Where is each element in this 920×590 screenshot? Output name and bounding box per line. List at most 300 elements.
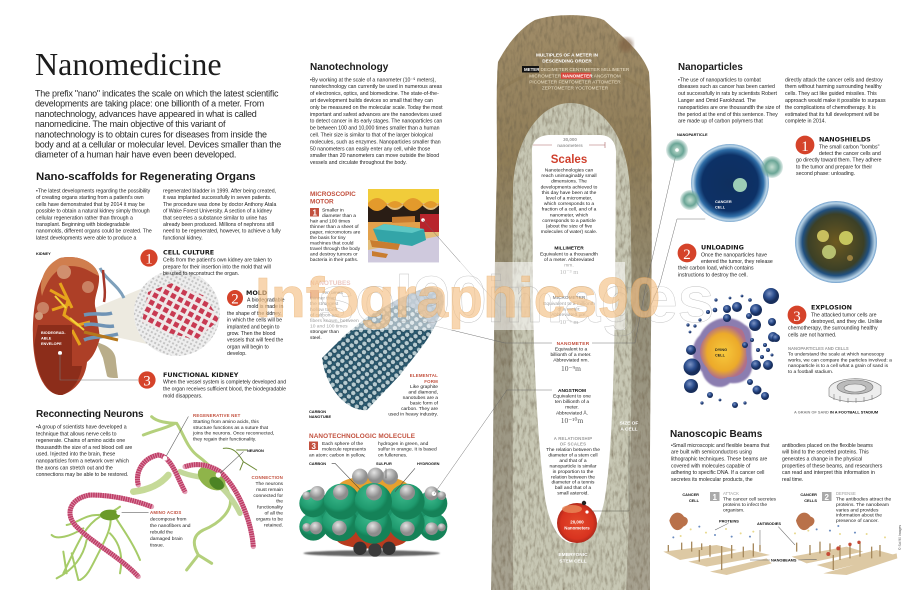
callout: elemental form: nanotubes are a bbox=[403, 395, 438, 401]
text: a relationship of scales: diameter of a tennis bbox=[552, 480, 595, 486]
callout: amino acids: rebuild the bbox=[150, 530, 173, 536]
block: multiples of a meter: MULTIPLES OF A METER IN bbox=[536, 52, 599, 58]
text: scales description: level of a micrometer, bbox=[546, 196, 592, 202]
caption: grain of sand: A GRAIN OF SAND IN A FOOTBALL STADIUM bbox=[794, 410, 878, 414]
step 2: mold: A biodegradable bbox=[247, 298, 285, 304]
illustration: red stem cell: Nanometers bbox=[564, 526, 590, 530]
block: microscopic motor: and destroy tumors or bbox=[310, 252, 358, 258]
step 1: nanoshields: NANOSHIELDS bbox=[819, 136, 871, 144]
scale: nanometer: 10⁻⁹m bbox=[561, 364, 581, 373]
label: biodegradable envelope: ENVELOPE bbox=[41, 342, 62, 346]
scale: millimeter: MILLIMETER bbox=[554, 246, 584, 252]
labels: molecule atoms bbox=[309, 461, 440, 466]
text: a relationship of scales: A RELATIONSHIP bbox=[554, 436, 592, 441]
step 2: unloading: Once the nanoparticles have bbox=[701, 252, 767, 258]
text: scales description: nanometer, which bbox=[550, 212, 588, 218]
illustration: cancer cell: CELL bbox=[715, 204, 726, 210]
block: nanotechnologic molecule text: hydrogen in green, and bbox=[378, 441, 429, 447]
text: nanoparticles column two: them without harming surrounding healthy bbox=[785, 84, 882, 90]
label: neuron: NEURON bbox=[247, 448, 264, 453]
illustration: embryonic cell background bbox=[491, 15, 652, 590]
step 1: attack: proteins to infect the bbox=[723, 502, 767, 508]
step 2: unloading bbox=[678, 244, 773, 278]
block: carbon nanotube text: thinner than bbox=[310, 296, 336, 302]
text: beams column two: will bind to the secreted proteins. This bbox=[782, 450, 869, 456]
illustration: carbon nanotube bbox=[322, 287, 444, 410]
text: nanoparticles and cells: works, we can compare the particles involved: a bbox=[788, 357, 892, 363]
intro text: developments are taking place: one billionth of a meter. From bbox=[35, 99, 264, 109]
step 1: cell culture: CELL CULTURE bbox=[163, 248, 214, 256]
callout: connection: CONNECTION bbox=[251, 475, 283, 480]
scale: millimeter bbox=[540, 246, 598, 276]
step 3: explosion: EXPLOSION bbox=[811, 304, 852, 312]
text: nanotechnology intro: smaller than 20 nanometers can move outside the blood bbox=[310, 153, 439, 159]
text: beams column one: adhering to specific DNA. If a cancer cell bbox=[671, 470, 764, 476]
scale: micrometer: of a meter. bbox=[557, 306, 581, 312]
step 1: attack: The cancer cell secretes bbox=[723, 496, 777, 502]
text: nanotechnology intro: to detect cancer in its early stages. The nanoparticles can bbox=[310, 119, 442, 125]
text: scaffolds column one: cells have demonstrated that by 2014 it may be bbox=[36, 202, 145, 208]
text: a relationship of scales: diameter of a stem cell bbox=[548, 452, 598, 458]
text: scales description: developments achieved to bbox=[541, 184, 598, 190]
text: nanotechnology intro: cell. Their size is similar to that of the larger biological bbox=[310, 132, 433, 138]
step 1: attack: 1 bbox=[712, 493, 718, 502]
text: neurons intro: regenerate. Chains of amino acids one bbox=[36, 438, 125, 444]
text: scales description: which corresponds to a bbox=[544, 201, 594, 207]
text: scaffolds column two: The procedure was done by doctor Anthony Atala bbox=[163, 202, 276, 208]
step 1: cell culture bbox=[140, 248, 272, 277]
text: neurons intro: thousandth the size of a red blood cell are bbox=[36, 445, 132, 451]
label: carbon nanotube: CARBON bbox=[309, 409, 326, 414]
illustration: nanobeams bbox=[663, 513, 897, 575]
text: a relationship of scales: small asteroid. bbox=[557, 491, 589, 497]
image: micromotor bbox=[368, 189, 439, 263]
text: nanoparticles column two: the complications of chemotherapy. It is bbox=[785, 105, 876, 111]
block: microscopic motor: MOTOR bbox=[310, 199, 334, 206]
connector: kidney to step three bbox=[60, 354, 138, 380]
credit: © Sol 90 Images bbox=[898, 525, 902, 550]
illustration: dying cell explosion bbox=[684, 288, 780, 408]
scale: micrometer: Abbreviated μm. bbox=[551, 312, 587, 318]
text: nanoparticles column two: approach would make it possible to surpass bbox=[785, 98, 886, 104]
step 3: functional kidney bbox=[138, 371, 286, 400]
callout: elemental form: used in heavy industry. bbox=[388, 412, 438, 418]
block: carbon nanotube text: the strongest bbox=[310, 301, 339, 307]
text: neurons intro: used. Injected into the brain, these bbox=[36, 452, 115, 458]
step 2: defense: varies and provides bbox=[836, 507, 879, 513]
scale: nanometer bbox=[550, 341, 592, 373]
text: beams column two: generates a change in the physical bbox=[782, 456, 862, 462]
text: a relationship of scales bbox=[546, 436, 600, 497]
step 2: unloading: their carbon load, which contains bbox=[678, 266, 754, 272]
block: microscopic motor: thinner than a sheet of bbox=[310, 224, 359, 230]
text: nanoparticles column one: are made up of carbon polymers that bbox=[678, 119, 763, 125]
illustration: dying cell explosion: DYING bbox=[715, 348, 727, 352]
block: multiples of a meter: DESCENDING ORDER bbox=[542, 58, 592, 64]
text: nanotechnology intro: art development builds devices so small that they can bbox=[310, 98, 433, 104]
text: nanoparticles and cells: nanoparticle is to a cell what a grain of sand is bbox=[788, 363, 889, 369]
heading: nanoparticles: Nanoparticles bbox=[678, 62, 743, 73]
step 1: cell culture: be used to reconstruct the organ. bbox=[163, 271, 239, 277]
text: scaffolds column two: of Wake Forest University. A section of a kidney bbox=[163, 209, 272, 215]
text: beams column two: can read and interpret this information in bbox=[782, 470, 875, 476]
step 2: defense: presence of cancer. bbox=[836, 518, 879, 524]
illustration: red stem cell: 20,000 bbox=[570, 520, 584, 524]
kidney label: KIDNEY bbox=[36, 251, 51, 256]
connector: size of a cell bbox=[592, 436, 629, 511]
text: a relationship of scales: OF SCALES bbox=[560, 441, 586, 446]
scale: angstrom: ANGSTROM bbox=[558, 388, 586, 394]
step 2: defense: information about the bbox=[836, 513, 882, 519]
text: scales description: fraction of a cell, and of a bbox=[542, 207, 597, 213]
illustration: tumor cell with nanoparticles bbox=[795, 201, 877, 283]
text: beams column one: lithographic techniques. These beams are bbox=[671, 456, 767, 462]
label: carbon nanotube: NANOTUBE bbox=[309, 414, 331, 419]
heading: reconnecting neurons: Reconnecting Neurons bbox=[36, 409, 144, 420]
block: multiples of a meter: METER bbox=[524, 67, 540, 72]
block: nanotechnologic molecule text bbox=[309, 433, 437, 458]
label: size of a cell: A CELL bbox=[620, 427, 638, 433]
text: scaffolds column two: regenerated bladder in 1999. After being created, bbox=[163, 188, 276, 194]
label: nanoparticle: NANOPARTICLE bbox=[677, 132, 708, 137]
panel: reconnecting neurons bbox=[36, 409, 284, 580]
text: nanotechnology intro: of electronics, optics, and biomedicine. The state-of-the- bbox=[310, 91, 439, 97]
illustration: cancer cell bbox=[680, 144, 783, 222]
text: scales description: molecules of water) scale. bbox=[541, 229, 597, 235]
text: nanoparticles column one: diseases such as cancer has been carried bbox=[678, 84, 775, 90]
step 2: unloading: entered the tumor, they release bbox=[701, 259, 773, 265]
block: microscopic motor: the basis for tiny bbox=[310, 235, 346, 241]
step 2: mold: the shape of the kidney, bbox=[227, 311, 282, 317]
text: scaffolds column one: transplant. Beginning with biodegradable bbox=[36, 222, 130, 228]
label: cancer cell: CANCER bbox=[682, 492, 699, 497]
callout: connection: the bbox=[276, 499, 283, 505]
scale: millimeter: Equivalent to a thousandth bbox=[540, 252, 598, 258]
step 2: mold: develop. bbox=[227, 351, 247, 357]
intro text: nanomedicine. The main objective of this variant of bbox=[35, 119, 226, 129]
text: nanoparticles column two: cells. They act like guided missiles. This bbox=[785, 91, 877, 97]
text: beams column one: are built with semiconductors using bbox=[671, 450, 752, 456]
text: scaffolds column two: already been produced. Millions of nephrons still bbox=[163, 222, 274, 228]
text: scaffolds column two: need to be regenerated, however, to achieve a fully bbox=[163, 229, 281, 235]
block: microscopic motor: 1 bbox=[312, 208, 318, 218]
illustration: neurons bbox=[52, 417, 257, 580]
callout: connection: must remain bbox=[256, 487, 283, 493]
callout: elemental form: carbon. They are bbox=[401, 406, 438, 412]
block: microscopic motor: MICROSCOPIC bbox=[310, 191, 356, 198]
callout: elemental form bbox=[388, 373, 439, 418]
step 2: defense: DEFENSE bbox=[836, 491, 856, 496]
text: nanoparticles and cells: to a football stadium. bbox=[788, 369, 833, 375]
label: embryonic stem cell: EMBRYONIC bbox=[558, 552, 588, 558]
step 3: explosion: 3 bbox=[793, 309, 801, 325]
step 2: mold: MOLD bbox=[246, 289, 267, 297]
heading: nano-scaffolds: Nano-scaffolds for Regenerating Organs bbox=[36, 171, 256, 183]
block: carbon nanotube text: NANOTUBES bbox=[310, 280, 351, 287]
label: embryonic stem cell: STEM CELL bbox=[559, 558, 587, 564]
block: multiples of a meter: MICROMETER NANOMETER ANGSTROM bbox=[529, 74, 621, 78]
block: nanotechnologic molecule text: an atom: carbon in yellow, bbox=[309, 452, 366, 458]
text: scaffolds column two: functional kidney. bbox=[163, 235, 203, 241]
panel: nanoparticles bbox=[666, 62, 892, 414]
scale: angstrom: ten billionth of a bbox=[555, 399, 589, 405]
scale: millimeter: mm. bbox=[564, 263, 574, 268]
text: nanotechnology intro: •By working at the scale of a nanometer (10⁻⁹ meters), bbox=[310, 77, 436, 83]
callout: amino acids: the nanofibers and bbox=[150, 523, 191, 529]
panel: nanoscopic beams bbox=[663, 429, 902, 575]
text: nanoparticles column one: the period at the end of this sentence. They bbox=[678, 112, 778, 118]
step 2: mold: grow. Then the blood bbox=[227, 331, 275, 337]
label: biodegradable envelope: BIODEGRAD- bbox=[41, 331, 66, 335]
text: scaffolds column two: that secretes a substance similar to urine has bbox=[163, 215, 267, 221]
scale: angstrom: 10⁻¹⁰m bbox=[561, 416, 583, 425]
callout: regenerative net: REGENERATIVE NET bbox=[193, 413, 241, 418]
block: multiples of a meter bbox=[522, 52, 630, 90]
text: a relationship of scales: nanoparticle is similar bbox=[549, 463, 597, 469]
title: Nanomedicine bbox=[35, 46, 222, 82]
intro text: diameter of a human hair have even been developed. bbox=[35, 150, 236, 160]
text: scaffolds column one: •The latest developments regarding the possibility bbox=[36, 188, 151, 194]
step 2: mold bbox=[227, 289, 285, 357]
intro text: The prefix "nano" indicates the scale on which the latest scientific bbox=[35, 88, 279, 98]
scale: micrometer: 10⁻⁶ m bbox=[560, 319, 578, 326]
text: neurons intro: technique that allows nerve cells to bbox=[36, 431, 117, 437]
dimension: 30,000 nanometers: 30,000 bbox=[563, 137, 577, 142]
step 1: cell culture: Cells from the patient's own kidney are taken to bbox=[163, 258, 272, 264]
block: microscopic motor: bacteria in their paths. bbox=[310, 257, 358, 263]
icon: football stadium bbox=[829, 379, 881, 403]
scale: angstrom: Equivalent to one bbox=[553, 394, 591, 400]
scale: angstrom: meter. bbox=[565, 405, 579, 411]
callout: amino acids: tissue. bbox=[150, 542, 164, 548]
labels: molecule atoms: HYDROGEN bbox=[417, 461, 440, 466]
callout: regenerative net: they regain their functionality. bbox=[193, 436, 256, 442]
label: cancer cells: CANCER bbox=[800, 492, 817, 497]
callout: elemental form: basic form of bbox=[410, 400, 439, 406]
step 2: unloading: instructions to destroy the cell. bbox=[678, 272, 748, 278]
connector lines to scale markers bbox=[423, 150, 707, 494]
callout: connection: functionality bbox=[257, 505, 284, 511]
text: beams column two: antibodies placed on the flexible beams bbox=[782, 443, 873, 449]
step 2: mold: implanted and begin to bbox=[227, 324, 280, 330]
text: a relationship of scales: and that of a bbox=[559, 458, 587, 464]
step 1: attack: organism. bbox=[723, 507, 744, 513]
step 3: functional kidney: the organ receives sufficient blood, the biodegradable bbox=[163, 386, 286, 392]
text: a relationship of scales: The relation between the bbox=[546, 447, 600, 453]
intro text: nanotechnology is to obtain cures for diseases from inside the bbox=[35, 129, 267, 139]
text: nanotechnology intro: vessels and circulate throughout the body. bbox=[310, 160, 407, 166]
label: nanobeams: NANOBEAMS bbox=[771, 558, 797, 562]
step 2: defense: 2 bbox=[824, 493, 830, 502]
text: nanoparticles column two: complete in 2014. bbox=[785, 119, 826, 125]
watermark: sol90images bbox=[318, 262, 714, 336]
step 3: explosion: The attacked tumor cells are bbox=[811, 312, 877, 318]
scale: nanometer: billionth of a meter. bbox=[550, 352, 592, 358]
illustration: magnified mesh bbox=[85, 270, 220, 356]
block: carbon nanotube text: steel. bbox=[310, 335, 322, 341]
step 3: functional kidney: mold disappears. bbox=[163, 394, 203, 400]
text: nanoparticles column one: •The use of nanoparticles to combat bbox=[678, 77, 761, 83]
text: nanotechnology intro: important and safest advances are the nanodevices used bbox=[310, 112, 442, 118]
block: microscopic motor: machines that could bbox=[310, 240, 354, 246]
text: neurons intro: connections may be able to be restored. bbox=[36, 472, 128, 478]
step 2: defense bbox=[822, 491, 891, 524]
dimension: 30,000 nanometers: nanometers bbox=[557, 143, 583, 148]
step 2: defense: The antibodies attract the bbox=[836, 496, 891, 502]
block: multiples of a meter: DECIMETER CENTIMETER MILLIMETER bbox=[540, 67, 630, 72]
text: scaffolds column one: latest developments were able to produce a bbox=[36, 235, 136, 241]
block: carbon nanotube text: Ten times bbox=[322, 290, 343, 296]
text: nanotechnology intro: be between 100 and 10,000 times smaller than a human bbox=[310, 126, 440, 132]
text: scales description: this day have been at the bbox=[542, 190, 597, 196]
label: proteins: PROTEINS bbox=[719, 518, 739, 524]
scale: millimeter: 10⁻³ m bbox=[560, 269, 578, 276]
callout: connection: retained. bbox=[264, 522, 283, 528]
text: beams column one: •Small microscopic and flexible beams that bbox=[671, 443, 770, 449]
block: nanotechnologic molecule text: 3 bbox=[312, 442, 316, 451]
block: microscopic motor bbox=[310, 191, 361, 263]
labels: molecule atoms: SULFUR bbox=[376, 461, 392, 466]
step 1: cell culture: 1 bbox=[145, 252, 153, 268]
text: nanoparticles column one: Langer and Omid Farokhzad. The bbox=[678, 98, 756, 104]
callout: amino acids: damaged brain bbox=[150, 536, 183, 542]
text: scaffolds column one: possible to obtain a natural kidney simply through bbox=[36, 209, 150, 215]
text: scales description: corresponds to a particle bbox=[542, 218, 596, 224]
scale: micrometer bbox=[543, 295, 595, 326]
step 1: attack: ATTACK bbox=[723, 491, 739, 496]
text: nanotechnology intro: 50 nanometers can easily enter any cell, while those bbox=[310, 146, 430, 152]
step 1: cell culture: prepare for their insertion into the mold that will bbox=[163, 264, 271, 270]
step 1: nanoshields bbox=[796, 136, 882, 177]
labels: molecule atoms: CARBON bbox=[309, 461, 326, 466]
text: nanotechnology intro: only be measured on the molecular scale. Today the most bbox=[310, 105, 443, 111]
scale: micrometer: Equivalent to a millionth bbox=[543, 301, 595, 307]
callout: amino acids: AMINO ACIDS bbox=[150, 510, 182, 515]
text: nanoparticles and cells: To understand the scale at which nanoscopy bbox=[788, 352, 885, 358]
step 2: unloading: UNLOADING bbox=[701, 244, 744, 252]
block: carbon nanotube text: stronger than bbox=[310, 329, 339, 335]
block: carbon nanotube text bbox=[310, 280, 359, 341]
scale: angstrom bbox=[553, 388, 591, 425]
scale: micrometer: MICROMETER bbox=[553, 295, 586, 301]
block: nanotechnologic molecule text: NANOTECHNOLOGIC MOLECULE bbox=[309, 433, 416, 440]
text: nanoparticles and cells: NANOPARTICLES AND CELLS bbox=[788, 346, 849, 351]
callout: regenerative net: structure functions as a suture that bbox=[193, 425, 269, 431]
panel: nano-scaffolds bbox=[33, 171, 286, 400]
text: scales description: (about the size of five bbox=[546, 224, 593, 230]
text: nanotechnology intro: nanotechnology can currently be used in numerous areas bbox=[310, 84, 442, 90]
text: nanoparticles column two: directly attack the cancer cells and destroy bbox=[785, 77, 883, 83]
step 2: defense: proteins. The nanobeam bbox=[836, 502, 889, 508]
illustration: nanoparticle bbox=[666, 139, 688, 161]
block: microscopic motor: hair and 100 times bbox=[310, 218, 351, 224]
heading: scales: Scales bbox=[551, 154, 587, 166]
step 1: nanoshields: 1 bbox=[801, 139, 809, 155]
heading: nanoscopic beams: Nanoscopic Beams bbox=[670, 429, 763, 440]
callout: regenerative net bbox=[192, 413, 274, 442]
watermark: Infographics90 bbox=[255, 266, 660, 330]
scale: nanometer: Equivalent to a bbox=[555, 346, 587, 352]
label: antibodies: ANTIBODIES bbox=[757, 521, 781, 526]
text: neurons intro: the axons can stretch out and the bbox=[36, 465, 113, 471]
intro text: nanotechnology, advances have appeared in what is called bbox=[35, 109, 257, 119]
panel: cell scale column bbox=[491, 15, 652, 590]
block: nanotechnologic molecule text: Each sphere of the bbox=[322, 441, 363, 447]
block: multiples of a meter: ZEPTOMETER YOCTOMETER bbox=[542, 86, 609, 90]
intro text: body and at a cellular or molecular level. Devices smaller than the bbox=[35, 140, 281, 150]
callout: connection: of all the bbox=[264, 510, 283, 516]
heading: nanotechnology: Nanotechnology bbox=[310, 62, 389, 73]
text: scales description: Nanotechnologies can bbox=[545, 168, 593, 174]
step 2: mold: in which the cells will be bbox=[227, 318, 282, 324]
callout: elemental form: ELEMENTAL bbox=[410, 373, 438, 378]
text: nanoparticles column two: estimated that its full development will be bbox=[785, 112, 879, 118]
step 3: explosion: destroyed, and they die. Unlike bbox=[811, 319, 882, 325]
block: nanotechnologic molecule text: sulfur in orange. It is based bbox=[378, 447, 437, 453]
step 3: explosion: cells are not harmed. bbox=[788, 332, 836, 338]
step 3: explosion bbox=[788, 304, 882, 338]
text: beams column two: properties of these beams, and researchers bbox=[782, 463, 883, 469]
block: nanotechnologic molecule text: molecule represents bbox=[322, 447, 367, 453]
step 1: attack bbox=[710, 491, 777, 513]
panel: nanotechnology bbox=[299, 62, 447, 557]
callout: elemental form: FORM bbox=[424, 379, 438, 384]
illustration: dying cell explosion: CELL bbox=[715, 353, 726, 357]
block: microscopic motor: paper, micromotors are bbox=[310, 230, 361, 236]
text: a relationship of scales: ball and that of a bbox=[555, 485, 591, 491]
block: carbon nanotube text: 10 and 100 times bbox=[310, 324, 348, 330]
illustration: molecule bbox=[299, 463, 447, 557]
step 1: nanoshields: detect the cancer cells and bbox=[819, 151, 881, 157]
step 1: nanoshields: second phase: unloading. bbox=[796, 171, 855, 177]
step 1: nanoshields: The small carbon "bombs" bbox=[819, 144, 880, 150]
step 2: unloading: 2 bbox=[683, 247, 691, 263]
scale: millimeter: of a meter. Abbreviated bbox=[544, 257, 594, 263]
block: carbon nanotube text: hollow tubes bbox=[310, 307, 338, 313]
step 3: functional kidney: 3 bbox=[143, 374, 151, 390]
text: a relationship of scales: relation between the bbox=[551, 474, 595, 480]
block: nanotechnologic molecule text: on fullerenes. bbox=[378, 452, 407, 458]
text: beams column one: covered with molecules capable of bbox=[671, 463, 751, 469]
step 2: mold: mold is made in bbox=[247, 304, 283, 310]
step 3: functional kidney: FUNCTIONAL KIDNEY bbox=[163, 371, 239, 379]
step 3: explosion: chemotherapy, the surrounding healthy bbox=[788, 326, 878, 332]
text: neurons intro: •A group of scientists have developed a bbox=[36, 424, 127, 430]
step 2: mold: 2 bbox=[231, 292, 239, 308]
text: neurons intro: nanoparticles form a network over which bbox=[36, 458, 129, 464]
callout: elemental form: and diamond, bbox=[408, 390, 438, 396]
text: scales description: dimensions. The bbox=[551, 179, 587, 185]
text: a relationship of scales: in proportion to the bbox=[553, 469, 594, 475]
illustration: red stem cell bbox=[557, 501, 597, 543]
scale: nanometer: NANOMETER bbox=[557, 341, 590, 347]
block: multiples of a meter: PICOMETER FEMTOMETER ATTOMETER bbox=[529, 80, 621, 84]
dimension: 30,000 nanometers bbox=[533, 137, 605, 148]
text: nanoparticles and cells bbox=[788, 346, 892, 375]
text: scaffolds column one: nanomolds, different organs could be created. The bbox=[36, 229, 152, 235]
step 1: nanoshields: to the tumor and prepare for their bbox=[796, 164, 872, 170]
step 2: mold: vessels that will feed the bbox=[227, 338, 283, 344]
text: beams column two: real time. bbox=[782, 477, 803, 483]
text: nanoparticles column one: nanoparticles are one thousandth the size of bbox=[678, 105, 781, 111]
callout: amino acids: decompose from bbox=[150, 516, 186, 522]
callout: connection: connected for bbox=[253, 493, 283, 499]
callout: regenerative net: Starting from amino acids, this bbox=[193, 419, 259, 425]
step 3: functional kidney: When the vessel system is completely developed and bbox=[163, 380, 286, 386]
text: beams column one: secretes its molecular products, the bbox=[671, 477, 753, 483]
text: nanoparticles column one: out successfully in rats by scientists Robert bbox=[678, 91, 777, 97]
callout: amino acids bbox=[150, 510, 191, 548]
